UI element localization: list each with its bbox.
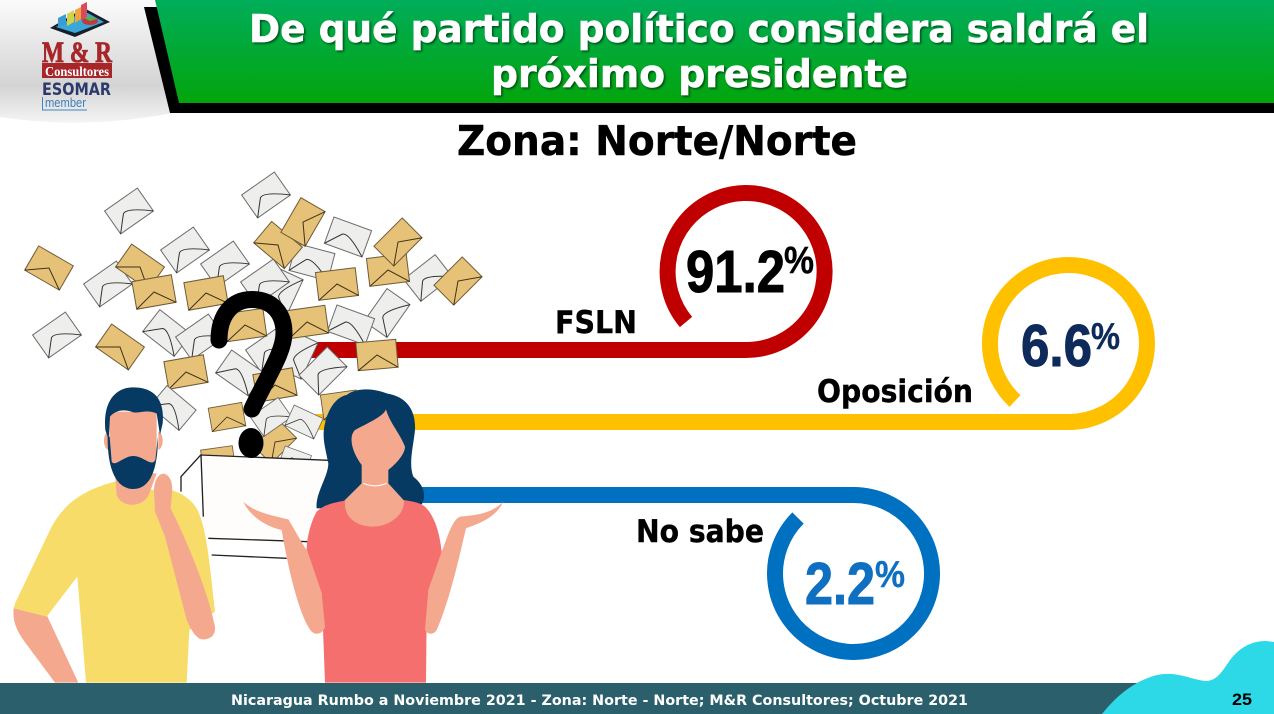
subtitle: Zona: Norte/Norte bbox=[457, 117, 857, 165]
logo text: ESOMAR: ESOMAR bbox=[42, 80, 111, 99]
header banner bbox=[144, 0, 1274, 113]
value: 6.6%: 6.6 bbox=[1021, 313, 1092, 379]
title bbox=[249, 7, 1149, 96]
teal corner shape bbox=[1102, 641, 1274, 714]
woman hair bbox=[317, 389, 424, 508]
label: No sabe: No sabe bbox=[636, 514, 764, 550]
logo text: member: member bbox=[45, 95, 87, 110]
man raised arm bbox=[154, 474, 215, 639]
man hair bbox=[105, 387, 163, 440]
man ears bbox=[104, 432, 163, 450]
value: 91.2%: % bbox=[784, 240, 814, 282]
title: próximo presidente bbox=[491, 52, 908, 96]
man left arm bbox=[13, 607, 78, 683]
man face bbox=[109, 412, 157, 480]
value: 2.2%: % bbox=[875, 554, 905, 595]
label: Oposición: Oposición bbox=[817, 374, 973, 410]
title: De qué partido político considera saldrá el bbox=[249, 7, 1149, 51]
man shirt bbox=[14, 482, 215, 683]
icon: tablet with chart bbox=[50, 2, 110, 37]
footer bar bbox=[0, 683, 1274, 714]
logo text: M & R: M & R bbox=[42, 36, 112, 69]
footer text: Nicaragua Rumbo a Noviembre 2021 - Zona: Norte - Norte; M&R Consultores; Octubre 2021 bbox=[231, 693, 968, 709]
yellow connector with ring bbox=[315, 265, 1147, 422]
icon: question mark bbox=[219, 300, 284, 458]
envelopes bbox=[25, 172, 482, 474]
woman face and neck bbox=[343, 409, 405, 528]
logo panel bbox=[0, 0, 172, 123]
ballot box bbox=[181, 455, 333, 558]
logo text: Consultores: Consultores bbox=[45, 65, 109, 80]
red connector with ring bbox=[300, 193, 825, 350]
label: FSLN: FSLN bbox=[555, 305, 637, 341]
woman left arm bbox=[243, 502, 325, 634]
man figure bbox=[13, 387, 215, 683]
woman figure bbox=[243, 389, 503, 683]
value: 6.6%: % bbox=[1091, 316, 1120, 357]
man neck bbox=[115, 473, 157, 505]
woman right arm bbox=[425, 502, 503, 634]
value: 2.2%: 2.2 bbox=[805, 551, 875, 617]
man beard bbox=[108, 437, 158, 489]
blue connector with ring bbox=[420, 495, 932, 652]
woman shirt bbox=[307, 500, 442, 683]
woman necklace bbox=[363, 483, 387, 486]
page number: 25 bbox=[1232, 690, 1252, 709]
value: 91.2%: 91.2 bbox=[686, 239, 785, 305]
